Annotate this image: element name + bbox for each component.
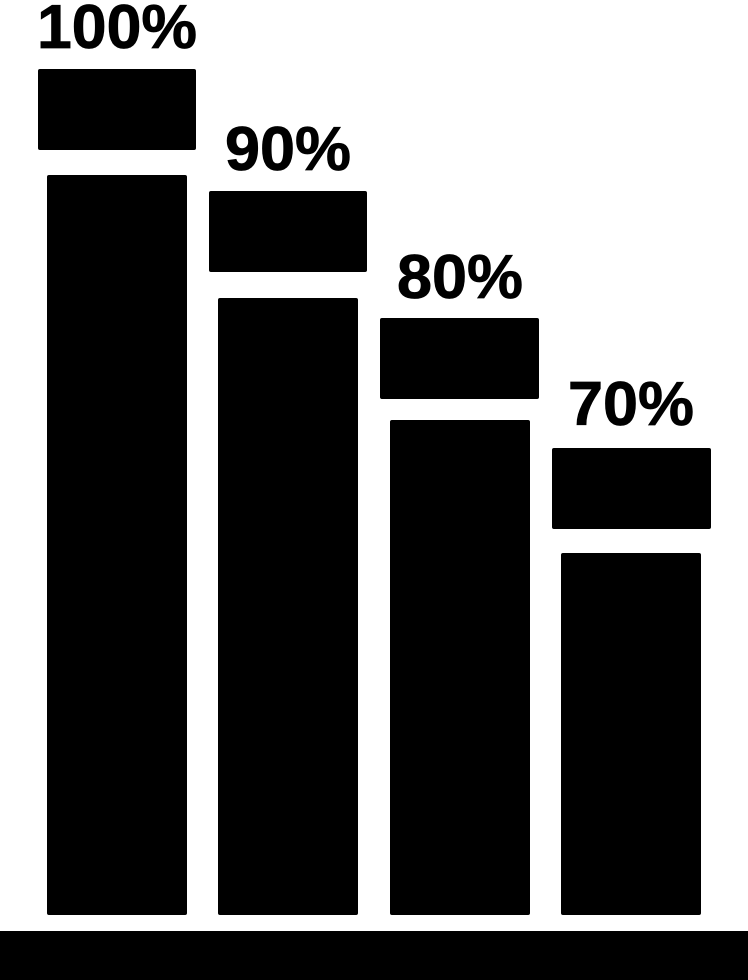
baseline [0,931,748,980]
label: 80%: 80% [397,243,523,312]
cap block: 90% [209,191,367,272]
column: 100% [37,0,197,915]
bar: 70% [561,553,701,915]
bar: 90% [218,298,358,915]
label: 90%: 90% [225,115,351,184]
cap block: 80% [380,318,539,399]
label: 70%: 70% [568,370,694,439]
cap block: 100% [38,69,196,150]
column: 80% [380,243,539,915]
cap block: 70% [552,448,711,529]
column: 70% [552,370,711,915]
bar: 80% [390,420,530,915]
column: 90% [209,115,367,915]
bar: 100% [47,175,187,915]
